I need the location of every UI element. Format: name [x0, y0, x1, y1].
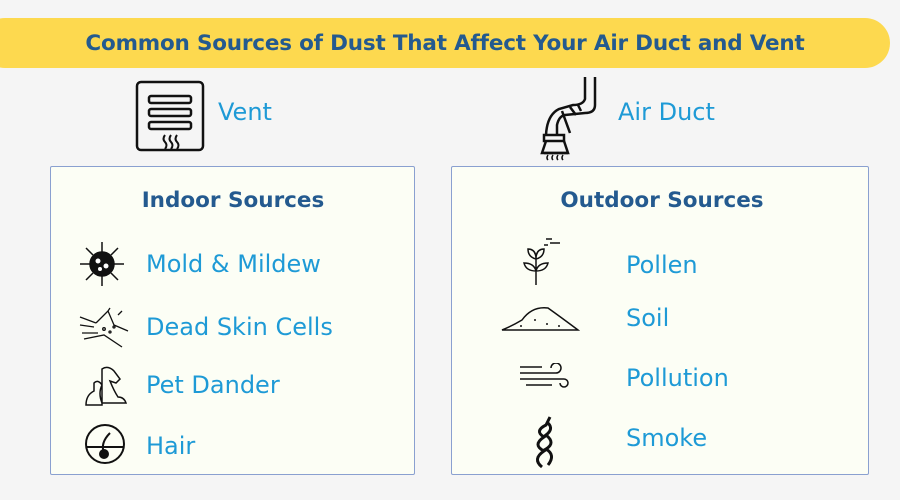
icon: skin [80, 308, 128, 348]
label: vent: Vent [218, 98, 272, 126]
text: soil: Soil [626, 304, 669, 332]
text: mold: Mold & Mildew [146, 250, 321, 278]
text: pollen: Pollen [626, 251, 698, 279]
icon: pollen [523, 238, 560, 285]
text: smoke: Smoke [626, 424, 707, 452]
title banner [0, 18, 890, 68]
heading: outdoor: Outdoor Sources [560, 188, 764, 213]
text: skin: Dead Skin Cells [146, 313, 333, 341]
icon: air duct [540, 77, 596, 160]
title banner: Common Sources of Dust That Affect Your Air Duct and Vent [85, 30, 805, 56]
icon: mold [80, 242, 124, 286]
panel: indoor sources [50, 166, 415, 475]
label: air duct: Air Duct [618, 98, 715, 126]
icon: smoke [536, 416, 553, 468]
text: pollution: Pollution [626, 364, 729, 392]
icon: vent [136, 80, 204, 152]
heading: indoor: Indoor Sources [142, 188, 324, 213]
icon: soil [502, 307, 580, 331]
icon: wind [520, 363, 569, 388]
text: pet: Pet Dander [146, 371, 280, 399]
icon: hair [85, 424, 125, 464]
text: hair: Hair [146, 432, 195, 460]
icon: pet [85, 366, 127, 406]
panel: outdoor sources [451, 166, 869, 475]
